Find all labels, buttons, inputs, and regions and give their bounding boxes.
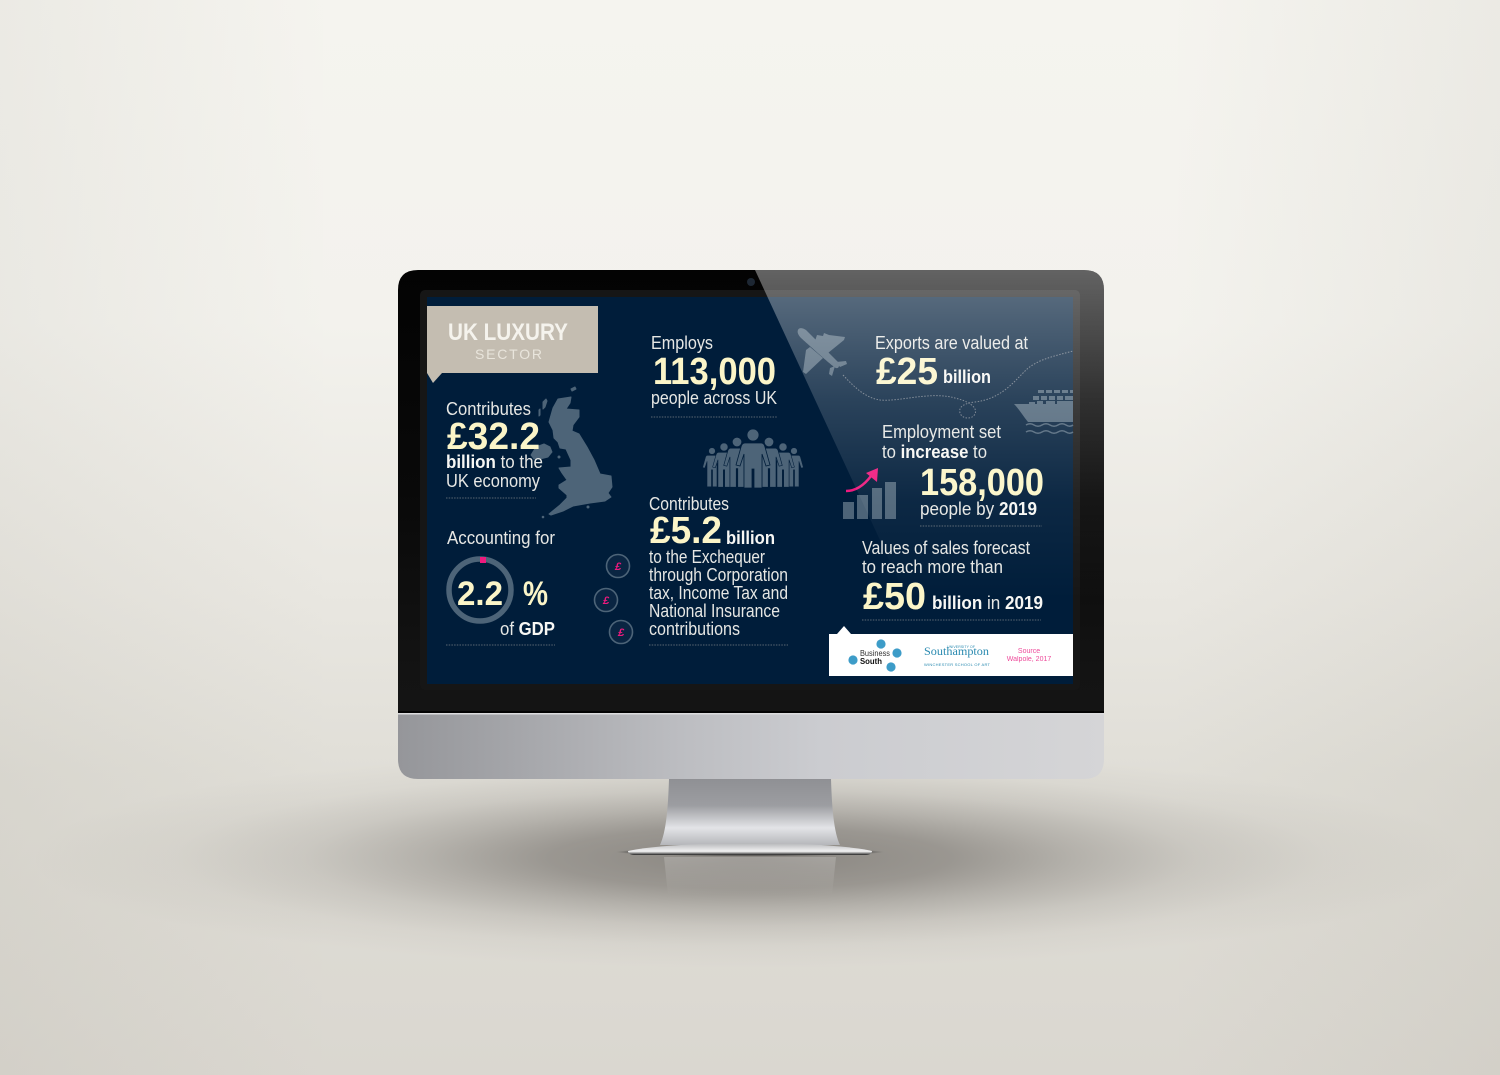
logo: University of Southampton — [924, 644, 991, 667]
floor shadow — [30, 748, 1470, 968]
stat: contributes 5.2 billion: National Insurance — [649, 601, 780, 621]
stat: employs 113,000: 113,000 — [653, 351, 776, 393]
stat: sales forecast 50 billion: Values of sales forecast — [862, 538, 1030, 558]
logo: University of Southampton: UNIVERSITY OF — [947, 645, 975, 649]
logo: University of Southampton: WINCHESTER SCHOOL OF ART — [924, 662, 991, 667]
stat: contributes 5.2 billion: to the Exchequer — [649, 547, 765, 567]
stat: employment 158,000 — [882, 422, 1044, 526]
stat: employment 158,000: people by 2019 — [920, 499, 1037, 519]
stat: employs 113,000: people across UK — [651, 388, 777, 408]
stat: exports 25 billion — [875, 333, 1028, 393]
logo: Business South — [848, 639, 902, 672]
source note: Walpole, 2017 — [1007, 656, 1051, 663]
tag: UK Luxury Sector — [427, 306, 598, 383]
stat: 2.2 percent of GDP — [446, 528, 555, 645]
tag: UK Luxury Sector: SECTOR — [475, 346, 542, 362]
stat: contributes 32.2 billion: £32.2 — [447, 416, 540, 458]
stat: employment 158,000: Employment set — [882, 422, 1001, 442]
source note: Source — [1018, 648, 1040, 655]
stat: contributes 32.2 billion — [446, 399, 543, 498]
stat: contributes 5.2 billion — [649, 494, 788, 645]
icon: pound coins: £ — [614, 561, 622, 573]
screen glare — [755, 270, 1104, 713]
stat: contributes 5.2 billion: through Corporation — [649, 565, 788, 585]
stat: exports 25 billion: £25 — [876, 351, 938, 393]
stat: contributes 32.2 billion: billion to the — [446, 452, 543, 472]
source note — [1007, 648, 1051, 663]
stat: sales forecast 50 billion: to reach more than — [862, 557, 1003, 577]
stat: sales forecast 50 billion: billion in 2019 — [932, 593, 1043, 613]
stat: employs 113,000 — [651, 333, 777, 417]
monitor chin — [398, 713, 1104, 779]
stat: contributes 5.2 billion: Contributes — [649, 494, 729, 514]
stat: exports 25 billion: Exports are valued at — [875, 333, 1028, 353]
stat: 2.2 percent of GDP: of GDP — [500, 619, 555, 639]
stat: 2.2 percent of GDP: Accounting for — [447, 528, 555, 548]
stat: employment 158,000: to increase to — [882, 442, 987, 462]
logo: University of Southampton: Southampton — [924, 644, 989, 658]
stat: contributes 5.2 billion: £5.2 — [650, 510, 722, 552]
icon: airplane — [798, 328, 847, 376]
stat: 2.2 percent of GDP: % — [523, 575, 548, 613]
logo: Business South: South — [860, 657, 882, 666]
donut chart — [449, 557, 511, 621]
icon: UK map — [531, 387, 612, 518]
stat: exports 25 billion: billion — [943, 367, 991, 387]
stat: contributes 5.2 billion: billion — [726, 528, 775, 548]
screen — [427, 297, 1073, 684]
stat: sales forecast 50 billion: £50 — [863, 576, 926, 618]
icon: pound coins: £ — [617, 627, 625, 639]
icon: group of people — [703, 429, 803, 488]
stat: contributes 5.2 billion: tax, Income Tax and — [649, 583, 788, 603]
sponsor panel — [829, 626, 1073, 676]
stat: contributes 32.2 billion: Contributes — [446, 399, 531, 419]
icon: pound coins: £ — [602, 595, 610, 607]
stat: 2.2 percent of GDP: 2.2 — [457, 575, 503, 613]
tag: UK Luxury Sector: UK LUXURY — [448, 319, 568, 346]
stat: sales forecast 50 billion — [862, 538, 1043, 620]
logo: Business South: Business — [860, 649, 890, 658]
stat: employment 158,000: 158,000 — [920, 462, 1044, 504]
icon: cargo ship — [1014, 390, 1073, 433]
stat: employs 113,000: Employs — [651, 333, 713, 353]
flight route dotted path — [843, 351, 1073, 418]
monitor bezel — [398, 270, 1104, 713]
monitor — [398, 270, 1104, 895]
webcam — [747, 278, 755, 286]
icon: pound coins — [594, 554, 632, 644]
stat: contributes 5.2 billion: contributions — [649, 619, 740, 639]
icon: rising bar chart with arrow — [843, 468, 896, 519]
monitor stand — [616, 779, 884, 895]
stat: contributes 32.2 billion: UK economy — [446, 471, 540, 491]
